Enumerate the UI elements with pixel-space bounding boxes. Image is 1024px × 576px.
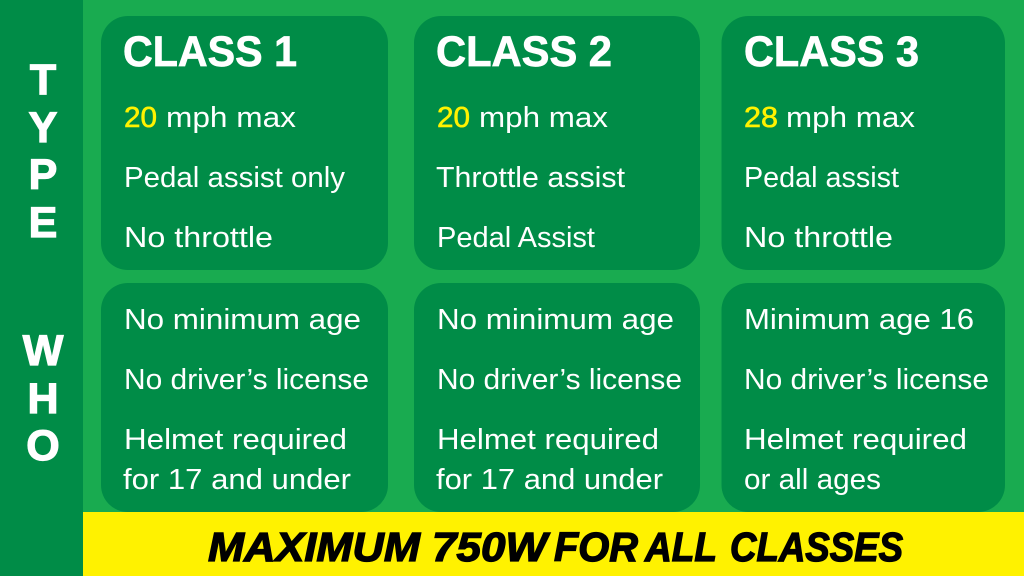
class 2 throttle: Throttle assist xyxy=(436,162,625,194)
footer banner xyxy=(83,512,1024,576)
sidebar label: TYPE: Y xyxy=(29,104,57,152)
class 1 helmet: for 17 and under xyxy=(123,464,351,496)
class 2 assist: Pedal Assist xyxy=(437,222,595,254)
class 2 age: No minimum age xyxy=(437,304,674,336)
sidebar label: WHO xyxy=(23,327,64,470)
class 2 speed: 20 xyxy=(437,102,470,134)
sidebar label: TYPE: P xyxy=(29,151,57,199)
class 1 speed xyxy=(124,102,297,134)
class 3 throttle: No throttle xyxy=(744,222,893,254)
footer text: CLASSES xyxy=(730,524,903,570)
class 3 helmet xyxy=(744,424,967,496)
sidebar label: TYPE: E xyxy=(29,199,57,247)
sidebar label: TYPE xyxy=(29,56,57,247)
class 3 helmet: or all ages xyxy=(744,464,881,496)
class 2 speed: mph max xyxy=(479,102,609,134)
left sidebar xyxy=(0,0,83,576)
footer text: MAXIMUM xyxy=(208,524,421,570)
class 3 helmet: Helmet required xyxy=(744,424,967,456)
sidebar label: WHO: H xyxy=(27,375,59,423)
class 1 speed: 20 xyxy=(124,102,157,134)
panel: class 1 who xyxy=(101,283,388,512)
panel: class 2 type xyxy=(414,16,700,270)
heading: class 1: CLASS 1 xyxy=(123,28,297,76)
class 2 helmet xyxy=(436,424,663,496)
class 1 speed: mph max xyxy=(166,102,297,134)
class 1 license: No driver’s license xyxy=(124,364,369,396)
panel: class 1 type xyxy=(101,16,388,270)
sidebar label: WHO: O xyxy=(26,422,60,470)
footer text: FOR xyxy=(554,524,638,570)
sidebar label: TYPE: T xyxy=(30,56,56,104)
panel: class 3 type xyxy=(722,16,1005,270)
class 1 assist: Pedal assist only xyxy=(124,162,345,194)
panel: class 3 who xyxy=(722,283,1005,512)
footer text: ALL xyxy=(644,524,717,570)
class 1 age: No minimum age xyxy=(124,304,361,336)
class 3 license: No driver’s license xyxy=(744,364,989,396)
class 1 throttle: No throttle xyxy=(124,222,273,254)
footer text: 750W xyxy=(432,524,551,570)
class 1 helmet xyxy=(123,424,351,496)
class 2 helmet: for 17 and under xyxy=(436,464,663,496)
sidebar label: WHO: W xyxy=(23,327,64,375)
class 3 assist: Pedal assist xyxy=(744,162,899,194)
footer text xyxy=(208,524,903,570)
class 2 license: No driver’s license xyxy=(437,364,682,396)
class 1 helmet: Helmet required xyxy=(124,424,347,456)
class 3 speed xyxy=(744,102,916,134)
class 2 helmet: Helmet required xyxy=(437,424,659,456)
class 3 speed: 28 xyxy=(744,102,778,134)
class 2 speed xyxy=(437,102,609,134)
heading: class 2: CLASS 2 xyxy=(436,28,612,76)
class 3 age: Minimum age 16 xyxy=(744,304,974,336)
class 3 speed: mph max xyxy=(786,102,916,134)
panel: class 2 who xyxy=(414,283,700,512)
heading: class 3: CLASS 3 xyxy=(744,28,919,76)
